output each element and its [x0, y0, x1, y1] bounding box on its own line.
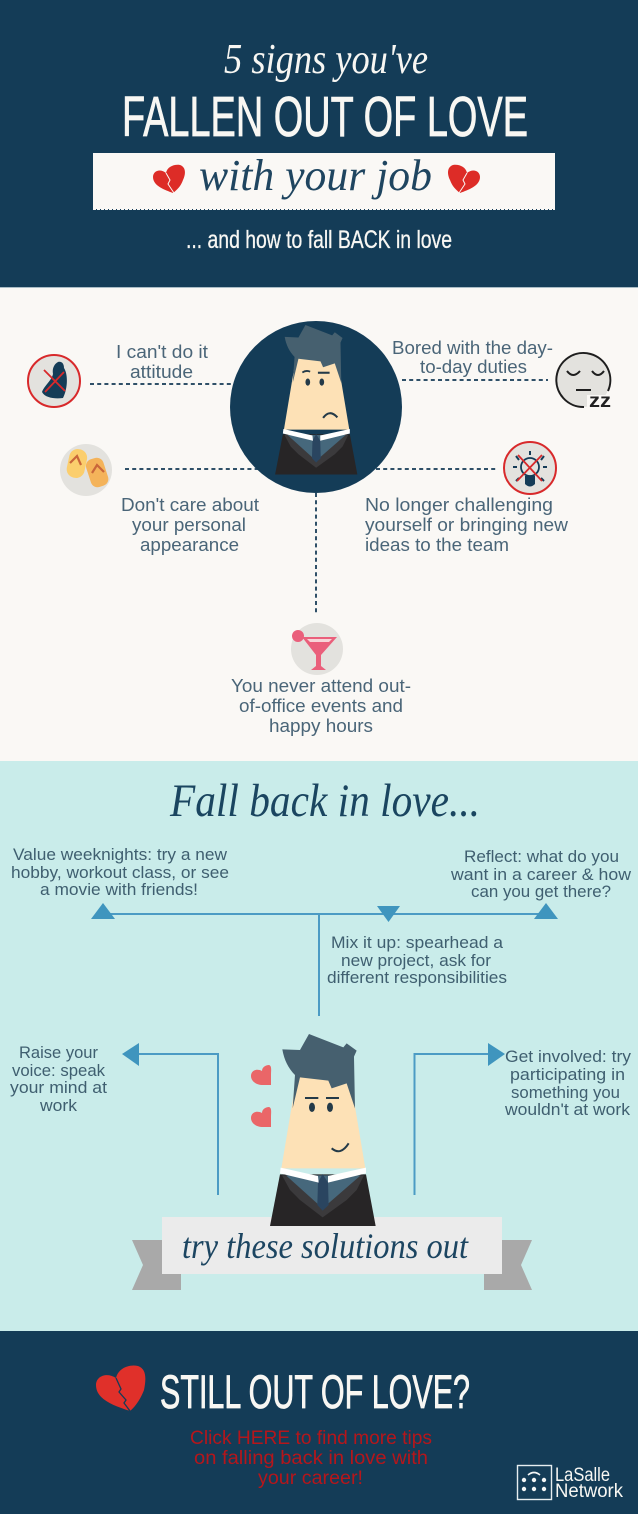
text: appearance: your personal [132, 515, 246, 535]
icon: sleeping face: zz [589, 391, 611, 412]
text: get involved: Get involved: try [505, 1048, 632, 1066]
banner: try these solutions out: try these solutions out [182, 1226, 469, 1266]
text: get involved: wouldn't at work [504, 1101, 631, 1119]
icon: crossed-out slumped figure [28, 355, 80, 407]
text: can't do it: attitude [130, 362, 193, 382]
text: raise your voice: voice: speak [12, 1062, 106, 1080]
banner: try these solutions out [132, 1217, 532, 1290]
illustration: sad man in circle [230, 321, 402, 493]
panel: header [0, 0, 638, 287]
text: bored [392, 338, 553, 377]
arrowheads [91, 903, 558, 1066]
text: mix it up [327, 934, 507, 987]
text: mix it up: different responsibilities [327, 969, 507, 987]
text: raise your voice: your mind at [10, 1079, 107, 1097]
logo: LaSalle Network [518, 1465, 623, 1502]
text: no longer challenging: yourself or bringing new [365, 515, 569, 535]
text: reflect: want in a career & how [450, 866, 631, 884]
diagram lines and arrows [103, 914, 546, 1195]
text: raise your voice [10, 1044, 107, 1115]
text: appearance: appearance [140, 535, 239, 555]
text: happy hours: of-office events and [239, 696, 403, 716]
text: bored: Bored with the day- [392, 338, 553, 358]
text: value weeknights: a movie with friends! [40, 881, 198, 899]
call to action: on falling back in love with [194, 1448, 428, 1469]
icon: crossed-out light bulb [504, 442, 556, 494]
text: no longer challenging: ideas to the team [365, 535, 509, 555]
call to action: your career! [258, 1468, 363, 1489]
call to action: Click HERE to find more tips [190, 1428, 432, 1449]
subtitle: ... and how to fall BACK in love [186, 226, 452, 254]
panel: footer [0, 1331, 638, 1514]
icon: heart lower [251, 1107, 271, 1127]
text: reflect [450, 848, 631, 901]
text: reflect: Reflect: what do you [464, 848, 619, 866]
text: no longer challenging: No longer challenging [365, 495, 553, 515]
text: get involved [504, 1048, 632, 1119]
text: happy hours [231, 676, 411, 736]
heading: still out of love: STILL OUT OF LOVE? [160, 1365, 470, 1418]
text: mix it up: new project, ask for [341, 952, 492, 970]
connector lines [90, 380, 548, 613]
illustration: happy man [270, 1034, 376, 1226]
text: no longer challenging [365, 495, 569, 555]
text: appearance: Don't care about [121, 495, 259, 515]
heading: fall back in love: Fall back in love... [169, 775, 480, 827]
icon: sleeping face [556, 353, 613, 412]
panel: five signs [0, 287, 638, 761]
text: bored: to-day duties [420, 357, 527, 377]
icon: broken heart left [153, 165, 185, 193]
banner: with your job: with your job [199, 151, 432, 200]
text: value weeknights: hobby, workout class, or see [11, 864, 229, 882]
icon: broken heart right [448, 165, 480, 193]
banner: with your job [93, 151, 555, 210]
call to action [190, 1428, 432, 1489]
logo: LaSalle Network: Network [555, 1481, 623, 1502]
text: value weeknights [11, 846, 229, 899]
text: raise your voice: Raise your [19, 1044, 98, 1062]
text: get involved: participating in [510, 1066, 625, 1084]
icon: large broken heart [96, 1366, 145, 1411]
text: happy hours: happy hours [269, 716, 373, 736]
heading: 5 signs you've: 5 signs you've [224, 37, 428, 83]
text: mix it up: Mix it up: spearhead a [331, 934, 504, 952]
panel: fall back in love [0, 761, 638, 1331]
text: raise your voice: work [39, 1097, 78, 1115]
icon: cocktail [291, 623, 343, 675]
text: can't do it [116, 342, 208, 382]
text: can't do it: I can't do it [116, 342, 208, 362]
man figure [275, 325, 357, 474]
text: reflect: can you get there? [471, 883, 611, 901]
text: value weeknights: Value weeknights: try a new [13, 846, 227, 864]
icon: flip flops [60, 444, 112, 496]
text: get involved: something you [511, 1084, 620, 1102]
logo: LaSalle Network: LaSalle [555, 1465, 610, 1486]
text: happy hours: You never attend out- [231, 676, 411, 696]
icon: heart upper [251, 1065, 271, 1085]
text: appearance [121, 495, 259, 555]
